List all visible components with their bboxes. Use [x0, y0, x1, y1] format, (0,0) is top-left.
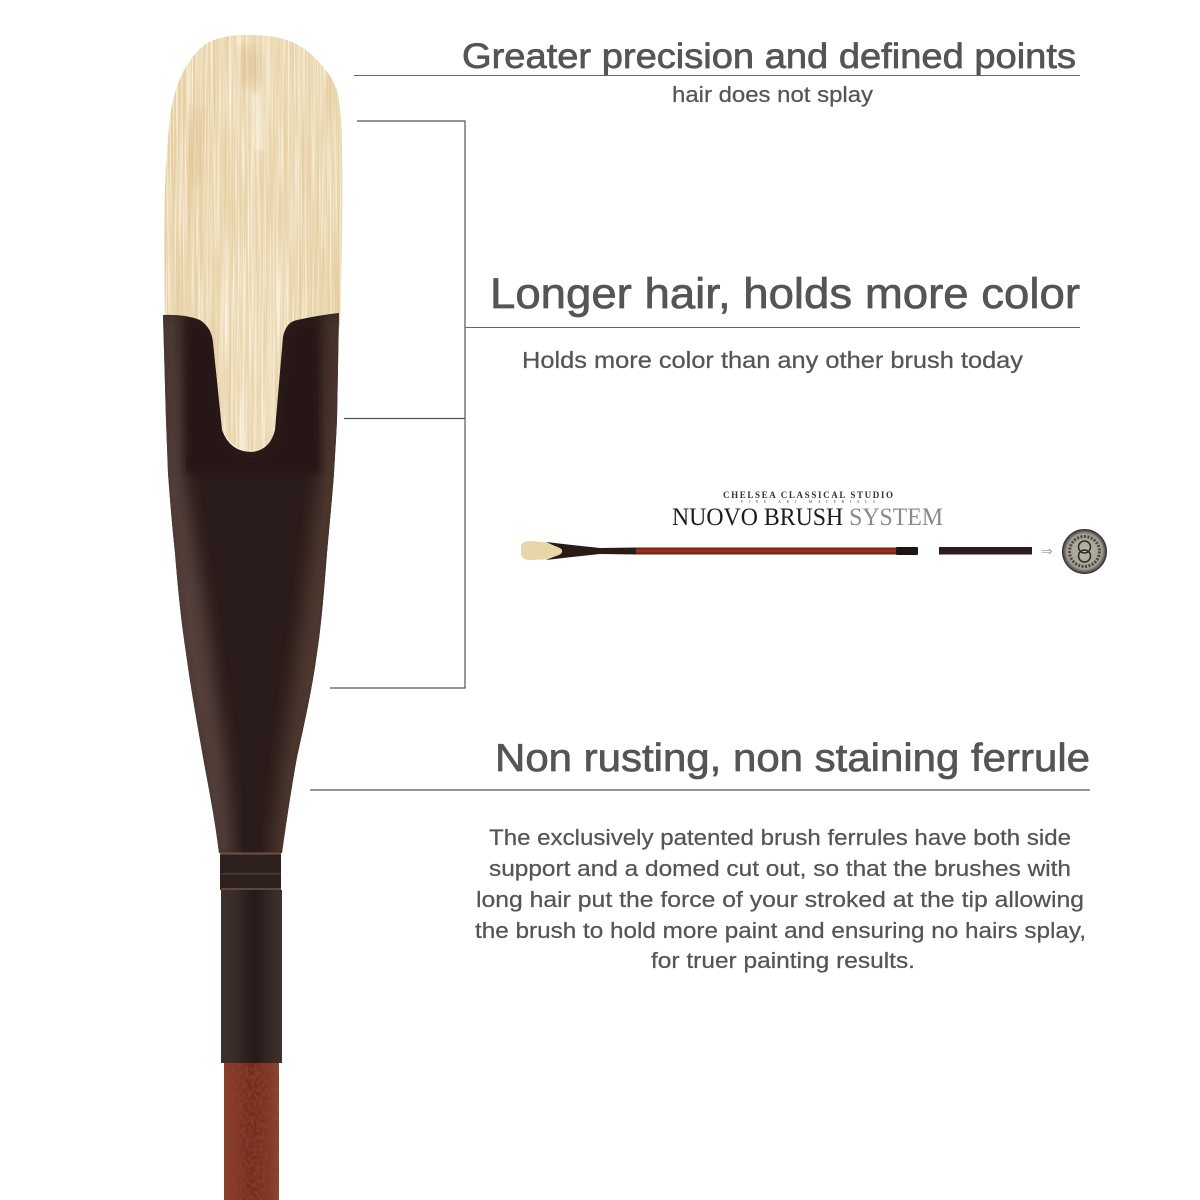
- main brush illustration: [155, 30, 350, 1200]
- body text: ferrule: long hair put the force of your stroked at the tip allowing: [476, 887, 1084, 912]
- callout: greater precision: [354, 37, 1080, 107]
- mini brush hair: [521, 541, 563, 560]
- callout: ferrule: [310, 737, 1090, 973]
- wooden handle: [224, 1063, 279, 1200]
- mini brush ferrule: [546, 542, 636, 560]
- heading: ferrule: Non rusting, non staining ferrule: [495, 737, 1090, 780]
- callout: longer hair: [465, 270, 1080, 373]
- mini brush end cap: [896, 547, 918, 555]
- infographic canvas: [163, 35, 1107, 1200]
- mini brush separated end: [939, 547, 1032, 554]
- body text: ferrule: The exclusively patented brush ferrules have both side: [489, 825, 1071, 850]
- brush end seal icon: [1062, 530, 1106, 574]
- ferrule rings: [220, 852, 281, 890]
- brush hair: [160, 30, 345, 460]
- mini brush handle: [636, 548, 896, 554]
- subtext: precision: hair does not splay: [672, 82, 873, 107]
- bracket connector: [330, 121, 465, 688]
- arrow: ⇒: [1041, 544, 1053, 560]
- body text: ferrule: the brush to hold more paint and ensuring no hairs splay,: [475, 918, 1086, 943]
- logo line: nuovo brush system: NUOVO BRUSH SYSTEM: [672, 504, 943, 531]
- body text: ferrule: support and a domed cut out, so that the brushes with: [489, 856, 1071, 881]
- mini brush diagram: [521, 530, 1106, 574]
- body text: ferrule: [475, 825, 1086, 973]
- subtext: longer hair: Holds more color than any other brush today: [522, 347, 1024, 373]
- heading: longer hair: Longer hair, holds more color: [490, 270, 1080, 318]
- product logo: [672, 490, 943, 531]
- logo line: fine art materials: FINE ART MATERIALS: [741, 499, 875, 504]
- logo line: studio name: CHELSEA CLASSICAL STUDIO: [723, 490, 893, 500]
- ferrule: [163, 313, 339, 853]
- leader line: precision: [354, 74, 1080, 76]
- body text: ferrule: for truer painting results.: [651, 948, 915, 973]
- ferrule tube: [221, 890, 282, 1063]
- leader line: longer hair: [465, 326, 1080, 328]
- heading: precision: Greater precision and defined points: [462, 37, 1076, 76]
- leader line: ferrule: [310, 789, 1090, 791]
